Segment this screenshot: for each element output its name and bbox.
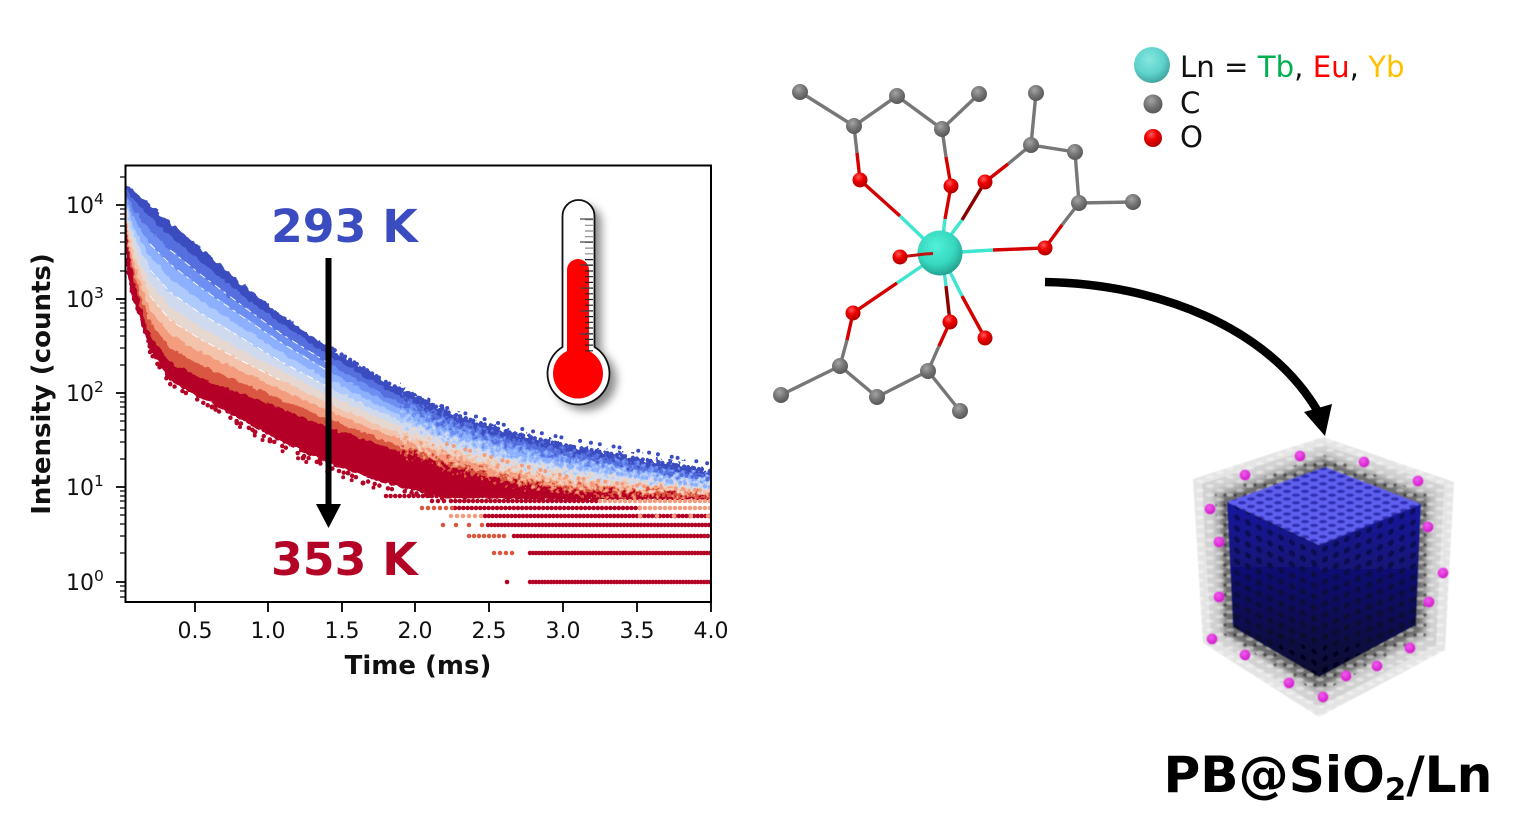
x tick labels: 4.0 [694, 619, 728, 644]
noisy edge beads [150, 346, 711, 499]
y tick labels: 1 [94, 472, 104, 490]
arrow: curved from molecule to nanoparticle [1045, 282, 1332, 436]
central lanthanide atom [918, 230, 962, 276]
title: PB@SiO2/Ln: /Ln [1406, 745, 1492, 804]
x tick labels: 3.0 [546, 619, 580, 644]
x tick labels [178, 619, 728, 644]
legend C atom [1144, 94, 1162, 114]
carbon-carbon and carbon-oxygen bonds [781, 92, 1133, 411]
legend Ln text: Ln = Tb, Eu, Yb [1180, 50, 1405, 84]
y tick labels: 10 [66, 194, 94, 219]
y tick labels: 10 [66, 382, 94, 407]
title: PB@SiO2/Ln: 2 [1385, 772, 1406, 808]
x tick labels: 2.5 [472, 619, 506, 644]
x tick labels: 2.0 [398, 619, 432, 644]
Prussian blue core: left face [1227, 502, 1319, 677]
legend Ln atom [1134, 47, 1170, 83]
left face texture [1227, 502, 1319, 677]
Prussian blue core: top face [1227, 467, 1421, 545]
x axis title: Time (ms) [345, 651, 491, 681]
y tick labels: 0 [94, 567, 104, 585]
front bond over central atom [900, 254, 933, 257]
x tick labels: 1.5 [324, 619, 360, 644]
legend O text: O [1180, 120, 1203, 154]
label: 293 K: 293 K [271, 200, 419, 253]
y tick labels: 3 [94, 284, 104, 302]
legend O atom [1144, 129, 1162, 147]
white gaps between curves [150, 244, 328, 387]
magenta Ln complexes [1204, 450, 1448, 702]
x tick labels: 0.5 [178, 619, 212, 644]
y tick labels: 10 [66, 571, 94, 596]
icon: thermometer [548, 200, 616, 411]
y tick labels [66, 190, 104, 596]
scatter data curves from 293 K to 353 K [126, 184, 711, 582]
Prussian blue core: right face [1319, 504, 1421, 677]
axis tick marks [116, 177, 711, 612]
outlier points [210, 404, 366, 486]
x tick labels: 1.0 [250, 619, 286, 644]
panel: Ln complex molecular structure [773, 84, 1141, 419]
y tick labels: 4 [94, 190, 104, 208]
legend [1134, 47, 1405, 154]
arrow: temperature increase [316, 258, 341, 528]
lanthanide side of bonds [897, 216, 993, 296]
x tick labels: 3.5 [620, 619, 654, 644]
panel: luminescence decay chart [27, 166, 728, 681]
right face texture [1319, 504, 1421, 677]
y tick labels: 10 [66, 476, 94, 501]
silica shell [1193, 437, 1454, 717]
y tick labels: 10 [66, 288, 94, 313]
title: PB@SiO2/Ln: PB@SiO [1164, 745, 1385, 804]
panel: core-shell nanocube [1193, 437, 1454, 717]
y tick labels: 2 [94, 378, 104, 396]
oxygen side of bonds [847, 153, 1062, 346]
label: 353 K: 353 K [271, 533, 419, 586]
y axis title: Intensity (counts) [27, 253, 57, 515]
quantized count rows [386, 496, 711, 582]
legend C text: C [1180, 86, 1200, 120]
carbon atoms [773, 84, 1141, 419]
axes frame [126, 166, 711, 602]
oxygen atoms [846, 172, 1052, 346]
